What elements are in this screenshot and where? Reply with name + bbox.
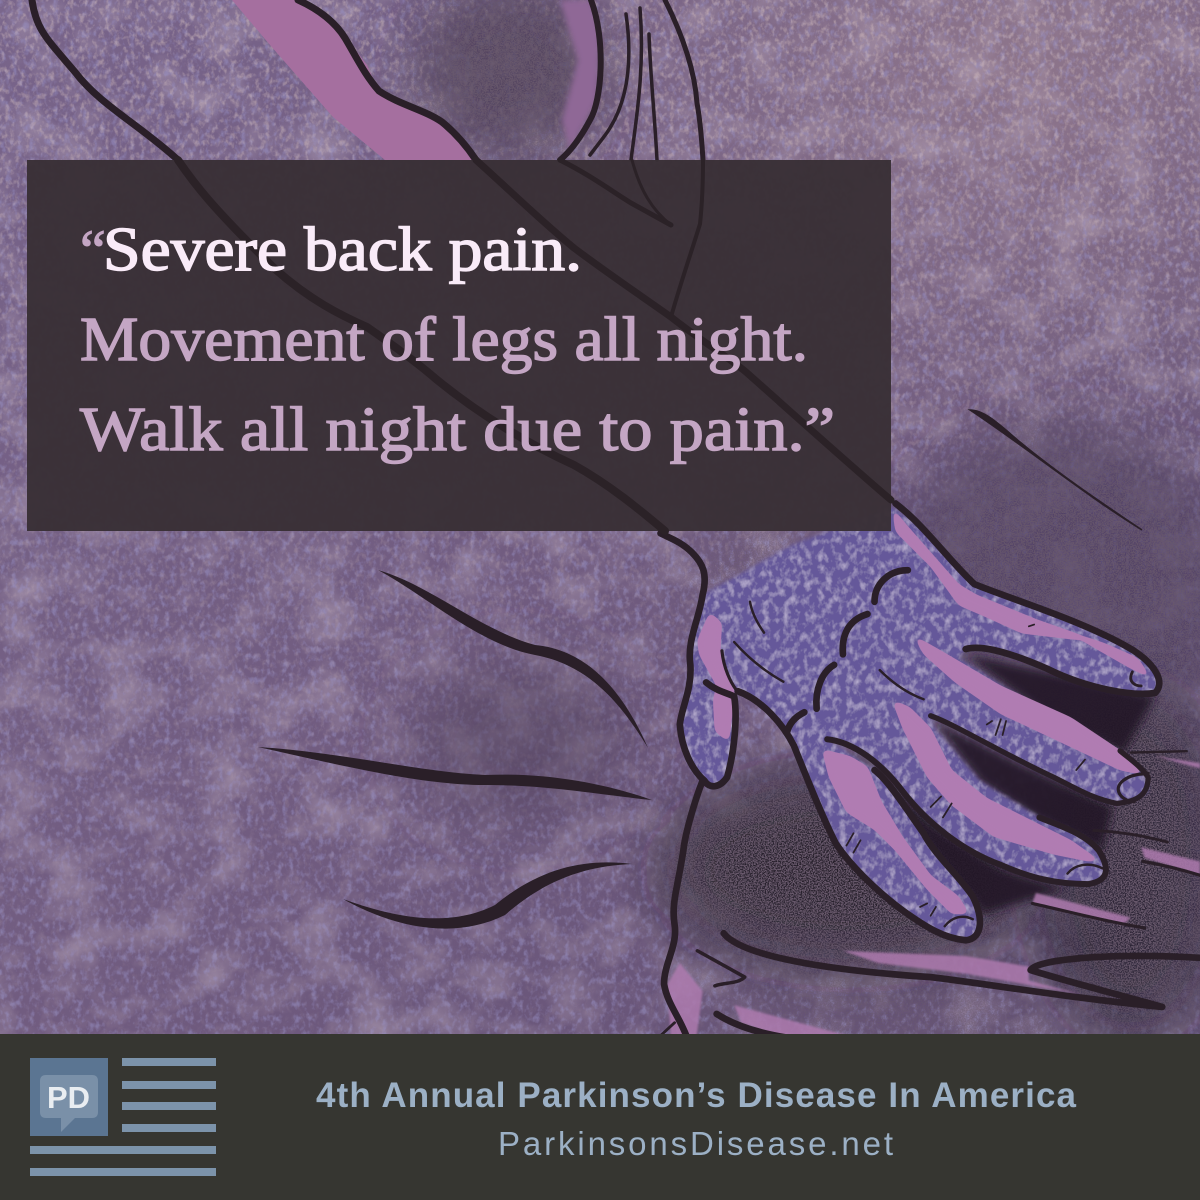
- hand base colour: [680, 507, 1159, 940]
- soft pink lower strokes: [668, 756, 1200, 1044]
- hand outlines: [652, 504, 1200, 1044]
- quote line 3: Walk all night due to pain.”: [80, 396, 835, 464]
- pink highlights: [697, 507, 1152, 914]
- quote line 1: “: [80, 218, 106, 283]
- lines seen through the panel: [178, 160, 891, 531]
- illustration: motion lines on the left: [258, 410, 1142, 929]
- quote panel: [27, 160, 891, 531]
- footer title: 4th Annual Parkinson’s Disease In America: [316, 1076, 1077, 1115]
- illustration: upper body lines: [32, 0, 703, 160]
- footer band: [0, 1034, 1200, 1200]
- logo: PD flag: PD: [47, 1080, 90, 1115]
- footer website: ParkinsonsDisease.net: [498, 1125, 893, 1162]
- logo: PD flag: [30, 1058, 216, 1176]
- illustration: hand: [652, 504, 1200, 1044]
- quote line 1: Severe back pain.: [103, 216, 582, 284]
- shadow gaps between fingers: [875, 654, 1155, 914]
- quote line 2: Movement of legs all night.: [80, 306, 808, 374]
